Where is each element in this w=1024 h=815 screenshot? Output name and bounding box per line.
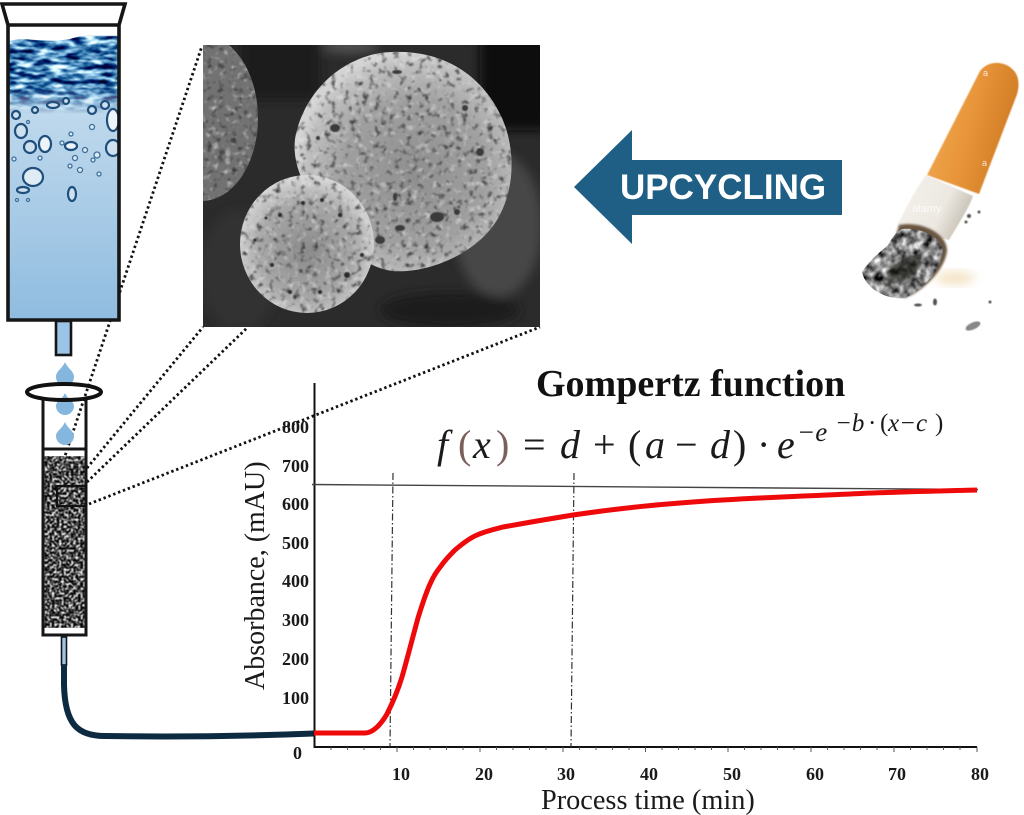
x tick labels: 40 [640, 764, 658, 784]
upcycling arrow: UPCYCLING [620, 168, 826, 207]
equation: ) [935, 410, 943, 437]
left particle [203, 45, 258, 201]
SEM micrograph [203, 45, 540, 327]
ash [862, 229, 943, 298]
drops [56, 362, 74, 445]
equation: + [593, 422, 616, 467]
equation [437, 410, 943, 467]
equation: · [868, 410, 876, 437]
water body [8, 27, 120, 319]
reservoir outline [2, 4, 125, 320]
y tick labels: 500 [282, 533, 309, 553]
equation: ( [458, 422, 471, 467]
y tick labels: 0 [293, 743, 302, 763]
equation: = [523, 422, 546, 467]
debris [914, 210, 992, 333]
y tick labels: 700 [282, 456, 309, 476]
x tick labels: 50 [723, 764, 741, 784]
dotted zoom lines [62, 46, 540, 504]
watermark: a [982, 158, 987, 168]
packed column [27, 384, 101, 665]
fit curve [314, 490, 977, 733]
x tick labels: 80 [971, 764, 989, 784]
spout [56, 321, 71, 355]
column packing [44, 456, 85, 628]
paper [897, 175, 973, 240]
column outline [43, 398, 86, 635]
equation: · [757, 422, 770, 467]
equation: x−c [887, 410, 927, 437]
burn edge [880, 224, 947, 298]
outlet [62, 637, 66, 665]
tube [64, 665, 314, 736]
y tick labels [282, 417, 309, 763]
equation: x [472, 422, 491, 467]
equation: e [777, 422, 795, 467]
equation: d [710, 422, 731, 467]
large particle [295, 52, 512, 271]
equation: ) [496, 422, 509, 467]
chart [240, 383, 989, 815]
y tick labels: 100 [282, 688, 309, 708]
equation: a [645, 422, 665, 467]
equation: −e [797, 417, 827, 447]
y tick labels: 400 [282, 571, 309, 591]
watermark [912, 68, 988, 215]
zoom square [57, 486, 86, 506]
equation: ( [880, 410, 888, 437]
x tick labels: 20 [475, 764, 493, 784]
title: Gompertz function [536, 363, 845, 405]
asymptote [312, 484, 978, 490]
equation: d [560, 422, 581, 467]
x tick labels: 10 [392, 764, 410, 784]
x tick labels: 70 [888, 764, 906, 784]
y axis title: Absorbance, (mAU) [240, 461, 271, 690]
x tick labels: 30 [557, 764, 575, 784]
x ticks [331, 747, 977, 752]
small particle [240, 175, 374, 313]
background shading [240, 45, 540, 327]
equation: ) [733, 422, 746, 467]
y tick labels: 300 [282, 610, 309, 630]
y tick labels: 600 [282, 494, 309, 514]
x tick labels [392, 764, 989, 784]
equation: f [437, 422, 453, 467]
x tick labels: 60 [806, 764, 824, 784]
equation: ( [628, 422, 641, 467]
cigarette butt [862, 63, 1018, 333]
y tick labels: 800 [282, 417, 309, 437]
watermark: alamy [912, 203, 942, 215]
reservoir with water [2, 4, 125, 355]
filter [927, 63, 1018, 194]
reference lines [390, 473, 574, 747]
equation: − [675, 422, 698, 467]
watermark: a [983, 68, 988, 78]
upcycling arrow [574, 130, 842, 244]
axes [314, 383, 977, 747]
equation: −b [835, 410, 864, 437]
column ring [27, 384, 101, 400]
char [882, 250, 926, 290]
y tick labels: 200 [282, 649, 309, 669]
